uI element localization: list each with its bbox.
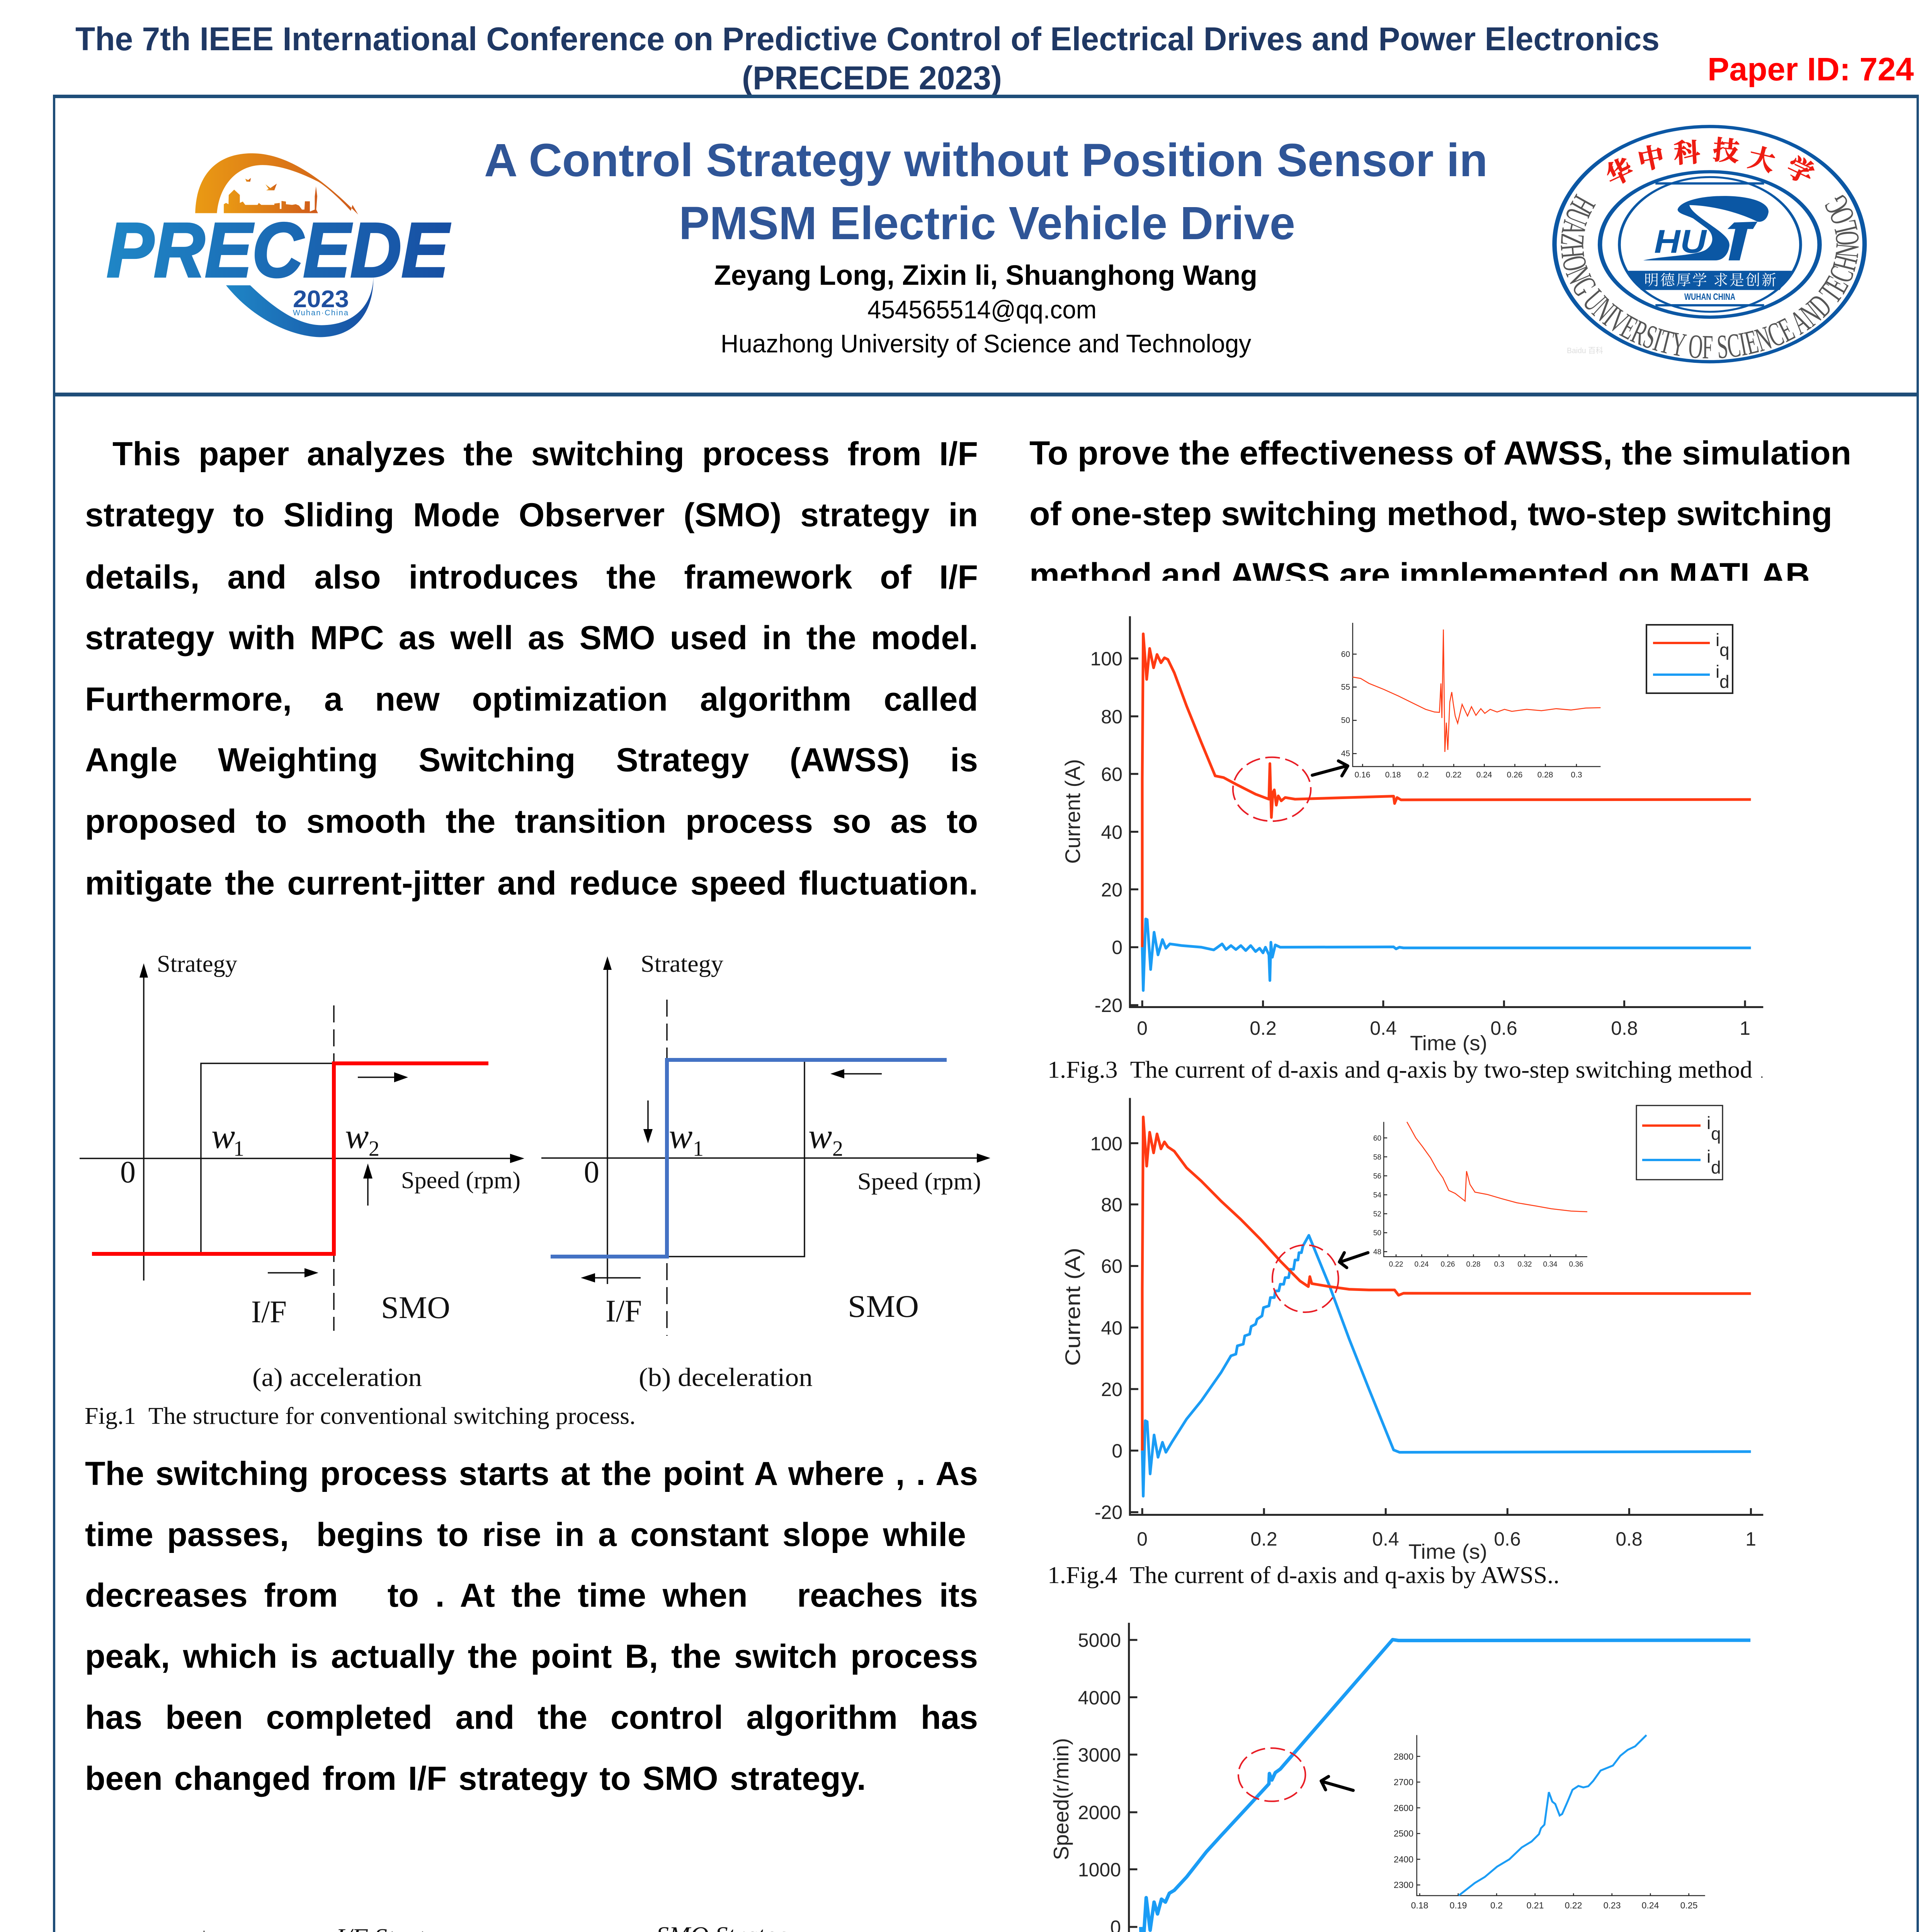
speed curve — [1141, 1639, 1750, 1932]
main title: A Control Strategy without Position Sensor in — [484, 134, 1488, 186]
legend — [1636, 1105, 1723, 1180]
tick labels: 4000 — [1078, 1687, 1121, 1709]
zoomed inset: 2300 — [1394, 1880, 1413, 1890]
zoomed inset: 0.32 — [1518, 1260, 1532, 1269]
zoomed inset: 60 — [1373, 1134, 1381, 1143]
zoomed inset: 0.28 — [1466, 1260, 1480, 1269]
right column intro text — [1030, 440, 1849, 581]
figure 3 caption end mark: . — [1760, 1068, 1764, 1080]
tick labels: 100 — [1090, 1133, 1122, 1155]
zoomed inset: 2700 — [1394, 1777, 1413, 1787]
zoomed inset: 0.23 — [1604, 1900, 1621, 1910]
figure 3: current by two-step switching — [1061, 616, 1763, 1055]
strategy switching line — [551, 1060, 947, 1257]
zoomed inset: 0.3 — [1571, 770, 1582, 779]
tick labels: 80 — [1101, 706, 1122, 728]
zoomed inset: 0.2 — [1417, 770, 1429, 779]
tick labels: 0.6 — [1494, 1528, 1521, 1550]
paragraph: switching process: time passes, begins to rise in a constant slope while — [85, 1516, 966, 1553]
panel a labels: 0 — [120, 1155, 136, 1189]
panel a labels — [120, 951, 520, 1392]
zoomed inset: 58 — [1373, 1153, 1381, 1162]
paragraph: paper summary: Furthermore, a new optimization algorithm called — [85, 681, 978, 718]
figure 4: current by AWSS — [1061, 1098, 1763, 1563]
tick labels: -20 — [1095, 1502, 1122, 1523]
paragraph: switching process: decreases from to . At the time when reaches its — [85, 1577, 978, 1614]
axes and hysteresis loop — [541, 956, 990, 1336]
zoomed inset: 0.22 — [1565, 1900, 1582, 1910]
email: 454565514@qq.com — [867, 295, 1097, 324]
y axis title: Speed(r/min) — [1049, 1738, 1073, 1860]
panel b labels: w — [669, 1116, 692, 1156]
paragraph: switching process — [85, 1454, 981, 1829]
figure 1 panel b: deceleration — [541, 951, 990, 1392]
zoomed inset: 60 — [1341, 650, 1350, 659]
zoomed inset: 56 — [1373, 1172, 1381, 1180]
legend — [1646, 625, 1733, 693]
main title — [484, 134, 1488, 249]
figure 1 caption: Fig.1 The structure for conventional switching process. — [85, 1403, 636, 1429]
axes and hysteresis loop — [80, 963, 524, 1331]
zoomed inset — [1394, 1735, 1705, 1910]
legend: q — [1711, 1124, 1721, 1144]
zoomed inset — [1373, 1122, 1587, 1269]
paragraph: paper summary: details, and also introduces the framework of I/F — [85, 559, 978, 596]
paragraph: switching process: The switching process starts at the point A where , . As — [85, 1455, 978, 1492]
tick labels: 60 — [1101, 764, 1122, 785]
legend: d — [1711, 1157, 1721, 1177]
zoomed inset: 0.22 — [1446, 770, 1461, 779]
paragraph: switching process: been changed from I/F strategy to SMO strategy. — [85, 1760, 866, 1797]
zoomed inset: 0.18 — [1385, 770, 1401, 779]
conference title: (PRECEDE 2023) — [742, 60, 1002, 97]
y axis title: Current (A) — [1061, 1248, 1085, 1366]
zoomed inset: 0.24 — [1415, 1260, 1429, 1269]
axes — [1130, 1098, 1763, 1515]
panel a labels: 1 — [233, 1137, 244, 1161]
paragraph: paper summary: mitigate the current-jitter and reduce speed fluctuation. — [85, 865, 978, 902]
zoomed inset: 2400 — [1394, 1854, 1413, 1864]
conference title: The 7th IEEE International Conference on Predictive Control of Electrical Drives and Power Electronics — [75, 21, 1660, 58]
tick labels: 1000 — [1078, 1859, 1121, 1881]
zoomed inset: 0.18 — [1411, 1900, 1428, 1910]
iq curve — [1142, 634, 1751, 947]
seal chinese name: 大 — [1745, 143, 1778, 177]
axes and guides — [199, 1930, 925, 1932]
zoomed inset: 0.24 — [1642, 1900, 1659, 1910]
right column intro text: of one-step switching method, two-step switching — [1029, 495, 1832, 532]
y axis title: Current (A) — [1061, 759, 1085, 864]
zoomed inset: 0.34 — [1543, 1260, 1558, 1269]
panel b labels: (b) deceleration — [639, 1362, 813, 1392]
tick labels: 20 — [1101, 1379, 1122, 1400]
panel a labels: SMO — [381, 1290, 450, 1325]
axes — [1129, 1623, 1763, 1932]
seal watermark: Baidu 百科 — [1567, 346, 1603, 355]
paragraph: switching process: peak, which is actually the point B, the switch process — [85, 1638, 978, 1675]
tick labels — [1090, 648, 1750, 1039]
panel a labels: Speed (rpm) — [401, 1167, 520, 1194]
id curve — [1142, 919, 1751, 990]
strategy switching line — [92, 1063, 488, 1254]
paragraph: paper summary: This paper analyzes the switching process from I/F — [112, 435, 978, 473]
figure 5: speed by two-step switching — [1049, 1623, 1763, 1932]
logo arc and skyline — [195, 153, 358, 214]
zoomed inset: 45 — [1341, 749, 1350, 758]
paragraph: paper summary: strategy to Sliding Mode Observer (SMO) strategy in — [85, 497, 978, 534]
seal chinese name: 中 — [1635, 141, 1667, 176]
panel a labels: w — [211, 1116, 235, 1156]
direction arrows — [581, 1069, 882, 1282]
tick labels: 5000 — [1078, 1629, 1121, 1651]
callout ring — [1233, 757, 1311, 821]
authors: Zeyang Long, Zixin li, Shuanghong Wang — [714, 260, 1257, 291]
conference title — [75, 21, 1660, 97]
seal chinese name: 技 — [1712, 135, 1740, 167]
seal chinese name — [1601, 135, 1818, 191]
paragraph: paper summary: strategy with MPC as well as SMO used in the model. — [85, 619, 978, 656]
axis and region labels — [106, 1922, 988, 1932]
zoomed inset: 0.25 — [1680, 1900, 1697, 1910]
legend: q — [1719, 640, 1730, 660]
tick labels: 40 — [1101, 821, 1122, 843]
x axis title: Time (s) — [1410, 1032, 1487, 1055]
panel b labels: I/F — [605, 1293, 642, 1328]
tick labels: -20 — [1095, 995, 1122, 1016]
tick labels: 2000 — [1078, 1802, 1121, 1823]
zoomed inset: 54 — [1373, 1191, 1381, 1199]
zoomed inset: 0.26 — [1441, 1260, 1455, 1269]
tick labels — [1090, 1133, 1756, 1550]
zoomed inset: 2600 — [1394, 1803, 1413, 1813]
tick labels: 0.2 — [1250, 1017, 1277, 1039]
zoomed inset: 2800 — [1394, 1752, 1413, 1762]
logo year: 2023 — [293, 286, 349, 313]
figure 3 caption: 1.Fig.3 The current of d-axis and q-axis by two-step switching method — [1048, 1057, 1752, 1083]
paragraph: paper summary — [85, 435, 981, 937]
tick labels: 0.8 — [1616, 1528, 1643, 1550]
zoomed inset: 0.3 — [1494, 1260, 1504, 1269]
tick labels: 0.6 — [1490, 1017, 1517, 1039]
legend: i — [1716, 630, 1719, 650]
right column intro text: method and AWSS are implemented on MATLAB — [1029, 556, 1810, 594]
logo place: Wuhan·China — [293, 309, 349, 317]
panel b labels: SMO — [848, 1289, 919, 1324]
main title: PMSM Electric Vehicle Drive — [679, 197, 1295, 249]
panel a labels: w — [345, 1116, 369, 1156]
tick labels: 0.8 — [1611, 1017, 1638, 1039]
tick labels: 1 — [1745, 1528, 1756, 1550]
logo: HUST university seal — [0, 0, 1867, 366]
seal chinese name: 华 — [1601, 153, 1638, 191]
tick labels: 1 — [1740, 1017, 1750, 1039]
axes — [1130, 616, 1763, 1007]
tick labels: 0 — [1137, 1528, 1148, 1550]
panel b labels — [584, 951, 981, 1392]
direction arrows — [268, 1072, 408, 1277]
tick labels: 0.4 — [1372, 1528, 1399, 1550]
callout arrow — [1312, 761, 1348, 776]
logo lower swoosh — [226, 277, 373, 337]
tick labels: 80 — [1101, 1194, 1122, 1216]
iq curve — [1142, 1117, 1751, 1451]
panel a labels: 2 — [369, 1137, 379, 1161]
logo: PRECEDE 2023 — [107, 153, 451, 337]
id curve — [1142, 1235, 1751, 1496]
tick labels: 20 — [1101, 879, 1122, 901]
paper id: Paper ID: 724 — [1708, 51, 1914, 87]
zoomed inset: 0.22 — [1389, 1260, 1403, 1269]
tick labels: 0 — [1112, 937, 1122, 958]
panel b labels: Strategy — [641, 951, 723, 977]
panel a labels: (a) acceleration — [252, 1362, 422, 1392]
paragraph: paper summary: proposed to smooth the transition process so as to — [85, 803, 978, 840]
zoomed inset: 0.2 — [1490, 1900, 1503, 1910]
legend: i — [1716, 662, 1719, 682]
tick labels — [1078, 1629, 1750, 1932]
paragraph: paper summary: Angle Weighting Switching Strategy (AWSS) is — [85, 742, 978, 779]
tick labels: 0 — [1112, 1440, 1122, 1462]
tick labels: 3000 — [1078, 1744, 1121, 1766]
panel b labels: 0 — [584, 1155, 599, 1189]
tick labels: 0.4 — [1370, 1017, 1397, 1039]
callout ring — [1272, 1245, 1338, 1312]
panel b labels: Speed (rpm) — [857, 1168, 981, 1195]
zoomed inset: 0.16 — [1355, 770, 1370, 779]
callout arrow — [1339, 1253, 1368, 1268]
zoomed inset: 52 — [1373, 1210, 1381, 1218]
paragraph: switching process: has been completed and the control algorithm has — [85, 1699, 978, 1736]
legend: d — [1719, 672, 1730, 692]
seal motto: 明德厚学 求是创新 — [1644, 272, 1776, 289]
figure 1 panel a: acceleration — [80, 951, 524, 1392]
panel a labels: Strategy — [157, 951, 237, 977]
panel b labels: w — [808, 1116, 832, 1156]
zoomed inset — [1341, 623, 1600, 779]
affiliation: Huazhong University of Science and Technology — [721, 329, 1251, 358]
x axis title: Time (s) — [1408, 1540, 1487, 1563]
zoomed inset: 0.19 — [1450, 1900, 1467, 1910]
zoomed inset: 50 — [1341, 716, 1350, 725]
seal rings — [1552, 125, 1867, 363]
legend: i — [1707, 1113, 1711, 1133]
callout arrow — [1321, 1777, 1353, 1790]
panel a labels: I/F — [251, 1294, 287, 1329]
figure 4 caption: 1.Fig.4 The current of d-axis and q-axis by AWSS.. — [1048, 1562, 1560, 1588]
zoomed inset: 0.26 — [1507, 770, 1522, 779]
zoomed inset: 0.21 — [1527, 1900, 1544, 1910]
seal location: WUHAN CHINA — [1684, 292, 1735, 302]
zoomed inset: 55 — [1341, 683, 1350, 692]
zoomed inset: 48 — [1373, 1248, 1381, 1256]
zoomed inset: 0.24 — [1476, 770, 1492, 779]
callout ring — [1238, 1748, 1305, 1801]
tick labels: 100 — [1090, 648, 1122, 670]
seal chinese name: 科 — [1673, 138, 1701, 168]
panel b labels: 1 — [693, 1137, 704, 1161]
tick labels: 40 — [1101, 1317, 1122, 1339]
legend: i — [1707, 1146, 1711, 1167]
right column intro text: To prove the effectiveness of AWSS, the simulation — [1029, 435, 1851, 472]
zoomed inset: 50 — [1373, 1229, 1381, 1237]
seal monogram: HU — [1654, 223, 1708, 260]
tick labels: 0.2 — [1250, 1528, 1277, 1550]
zoomed inset: 2500 — [1394, 1828, 1413, 1838]
tick labels: 0 — [1137, 1017, 1148, 1039]
seal chinese name: 学 — [1782, 152, 1818, 190]
figure 2: dq current trend — [106, 1922, 988, 1932]
logo wordmark: PRECEDE — [107, 207, 451, 293]
zoomed inset: 0.28 — [1537, 770, 1553, 779]
zoomed inset: 0.36 — [1569, 1260, 1583, 1269]
tick labels: 60 — [1101, 1255, 1122, 1277]
panel b labels: 2 — [832, 1137, 843, 1161]
